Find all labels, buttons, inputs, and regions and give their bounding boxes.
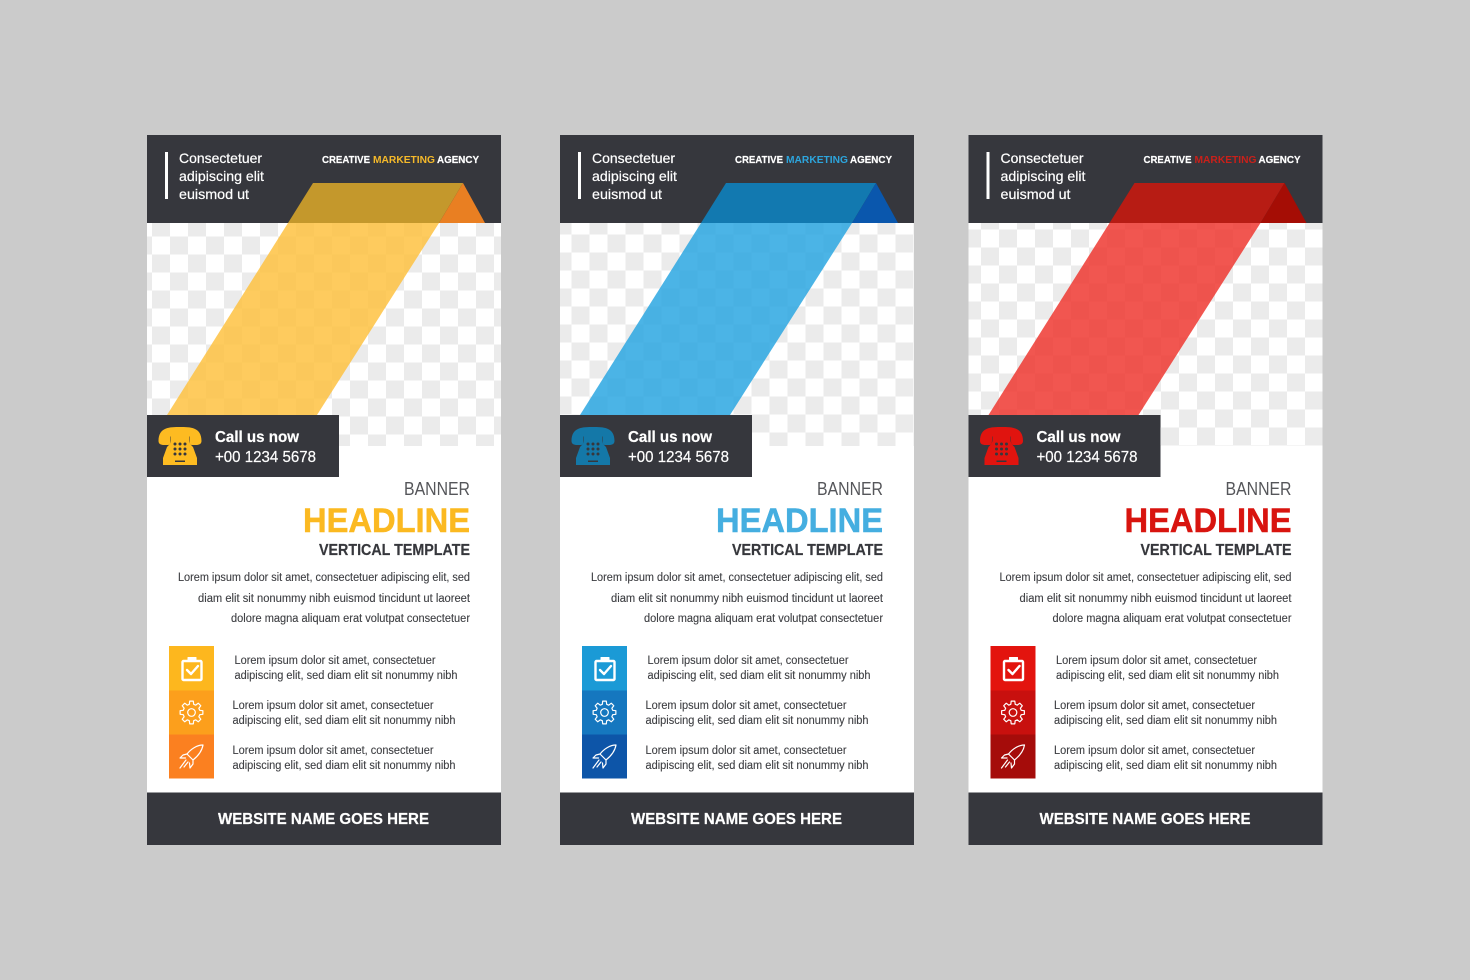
intro paragraph: diam elit sit nonummy nibh euismod tincidunt ut laoreet [198, 593, 471, 605]
agency name: AGENCY [437, 154, 479, 166]
translucent ribbon [988, 223, 1260, 415]
list text [232, 655, 458, 772]
call text [1036, 429, 1138, 466]
list text: adipiscing elit, sed diam elit sit nonummy nibh [1054, 715, 1277, 727]
call text: +00 1234 5678 [215, 449, 316, 466]
list text: Lorem ipsum dolor sit amet, consectetuer [232, 745, 434, 757]
header tagline: adipiscing elit [179, 168, 264, 184]
header tagline: euismod ut [592, 186, 662, 202]
icon: clipboard [182, 658, 202, 680]
header divider [578, 152, 581, 199]
list text: Lorem ipsum dolor sit amet, consectetuer [1056, 655, 1257, 667]
heading: headline: HEADLINE [716, 502, 883, 540]
footer bar [560, 792, 914, 845]
agency name: CREATIVE [1144, 154, 1192, 166]
list text: Lorem ipsum dolor sit amet, consectetuer [1054, 745, 1255, 757]
list text: adipiscing elit, sed diam elit sit nonummy nibh [1056, 670, 1279, 682]
intro paragraph: diam elit sit nonummy nibh euismod tincidunt ut laoreet [611, 593, 884, 605]
header bar [147, 135, 501, 223]
header tagline: Consectetuer [592, 150, 675, 166]
list text: adipiscing elit, sed diam elit sit nonummy nibh [646, 715, 868, 727]
footer bar [147, 792, 501, 845]
intro paragraph: diam elit sit nonummy nibh euismod tincidunt ut laoreet [1020, 593, 1292, 605]
translucent ribbon [167, 223, 439, 415]
list text: Lorem ipsum dolor sit amet, consectetuer [1054, 700, 1255, 712]
checker image placeholder [147, 223, 501, 446]
intro paragraph [178, 572, 471, 625]
ribbon over header [1110, 183, 1284, 223]
header bar [560, 135, 914, 223]
agency name: MARKETING [786, 154, 848, 166]
footer bar [968, 792, 1322, 845]
header tagline: Consectetuer [179, 150, 262, 166]
footer text: WEBSITE NAME GOES HERE [218, 811, 429, 828]
intro paragraph: Lorem ipsum dolor sit amet, consectetuer adipiscing elit, sed [591, 572, 883, 584]
intro paragraph [591, 572, 884, 625]
header divider [165, 152, 168, 199]
call text [628, 429, 729, 466]
header tagline [1000, 150, 1086, 202]
icon: telephone [158, 427, 202, 465]
footer text: WEBSITE NAME GOES HERE [631, 811, 842, 828]
icon: rocket [593, 745, 616, 768]
ribbon fold [852, 183, 898, 223]
heading: banner: BANNER [817, 479, 883, 499]
call text: Call us now [628, 429, 713, 446]
checker image placeholder [560, 223, 914, 446]
icon: clipboard [596, 658, 614, 680]
list text [646, 655, 870, 772]
agency name: MARKETING [373, 154, 435, 166]
list text: Lorem ipsum dolor sit amet, consectetuer [234, 655, 436, 667]
list text: adipiscing elit, sed diam elit sit nonummy nibh [232, 760, 456, 772]
agency name: CREATIVE [735, 154, 783, 166]
icon: gear [593, 701, 616, 724]
header tagline: euismod ut [1000, 186, 1071, 202]
list text: adipiscing elit, sed diam elit sit nonummy nibh [648, 670, 870, 682]
intro paragraph [1000, 572, 1292, 625]
call text: +00 1234 5678 [628, 449, 729, 466]
header tagline: adipiscing elit [1000, 168, 1086, 184]
header bar [968, 135, 1322, 223]
panel: yellow banner [147, 135, 501, 845]
list text: adipiscing elit, sed diam elit sit nonummy nibh [1054, 760, 1277, 772]
header tagline: adipiscing elit [592, 168, 677, 184]
ribbon fold [439, 183, 485, 223]
agency name: MARKETING [1194, 154, 1256, 166]
ribbon over header [288, 183, 463, 223]
ribbon fold [1260, 183, 1306, 223]
heading: banner: BANNER [1226, 479, 1292, 499]
icon: gear [1002, 701, 1024, 724]
subheading: VERTICAL TEMPLATE [732, 542, 883, 559]
intro paragraph: Lorem ipsum dolor sit amet, consectetuer adipiscing elit, sed [1000, 572, 1292, 584]
list text: Lorem ipsum dolor sit amet, consectetuer [232, 700, 434, 712]
list text: adipiscing elit, sed diam elit sit nonummy nibh [232, 715, 456, 727]
footer text: WEBSITE NAME GOES HERE [1040, 811, 1251, 828]
agency name: CREATIVE [322, 154, 370, 166]
checker image placeholder [968, 223, 1322, 446]
ribbon over header [701, 183, 876, 223]
icon: rocket [180, 745, 203, 768]
translucent ribbon [580, 223, 852, 415]
list text: adipiscing elit, sed diam elit sit nonummy nibh [646, 760, 868, 772]
icon: clipboard [1004, 658, 1023, 680]
panel: red banner [968, 135, 1322, 845]
intro paragraph: dolore magna aliquam erat volutpat consectetuer [1052, 613, 1292, 625]
call text [215, 429, 316, 466]
agency name [735, 154, 892, 166]
list text: adipiscing elit, sed diam elit sit nonummy nibh [234, 670, 458, 682]
header tagline: Consectetuer [1000, 150, 1084, 166]
agency name: AGENCY [1258, 154, 1300, 166]
list text: Lorem ipsum dolor sit amet, consectetuer [648, 655, 849, 667]
icon: telephone [980, 427, 1023, 465]
call text: Call us now [1036, 429, 1121, 446]
heading: banner: BANNER [404, 479, 470, 499]
header tagline [179, 150, 264, 202]
agency name [1144, 154, 1300, 166]
icon column [582, 646, 627, 778]
call box [968, 415, 1160, 477]
subheading: VERTICAL TEMPLATE [319, 542, 470, 559]
intro paragraph: dolore magna aliquam erat volutpat consectetuer [644, 613, 883, 625]
list text [1054, 655, 1279, 772]
subheading: VERTICAL TEMPLATE [1140, 542, 1292, 559]
icon: rocket [1002, 745, 1024, 768]
list text: Lorem ipsum dolor sit amet, consectetuer [646, 700, 847, 712]
header tagline [592, 150, 677, 202]
intro paragraph: Lorem ipsum dolor sit amet, consectetuer adipiscing elit, sed [178, 572, 470, 584]
icon column [990, 646, 1036, 778]
icon: telephone [572, 427, 614, 465]
icon column [169, 646, 214, 778]
agency name: AGENCY [850, 154, 892, 166]
panel: blue banner [560, 135, 914, 845]
call text: +00 1234 5678 [1036, 449, 1138, 466]
header divider [986, 152, 990, 199]
call text: Call us now [215, 429, 300, 446]
icon: gear [180, 701, 203, 724]
heading: headline: HEADLINE [303, 502, 470, 540]
list text: Lorem ipsum dolor sit amet, consectetuer [646, 745, 847, 757]
heading: headline: HEADLINE [1124, 502, 1292, 540]
intro paragraph: dolore magna aliquam erat volutpat consectetuer [231, 613, 470, 625]
call box [560, 415, 752, 477]
call box [147, 415, 339, 477]
agency name [322, 154, 479, 166]
header tagline: euismod ut [179, 186, 249, 202]
